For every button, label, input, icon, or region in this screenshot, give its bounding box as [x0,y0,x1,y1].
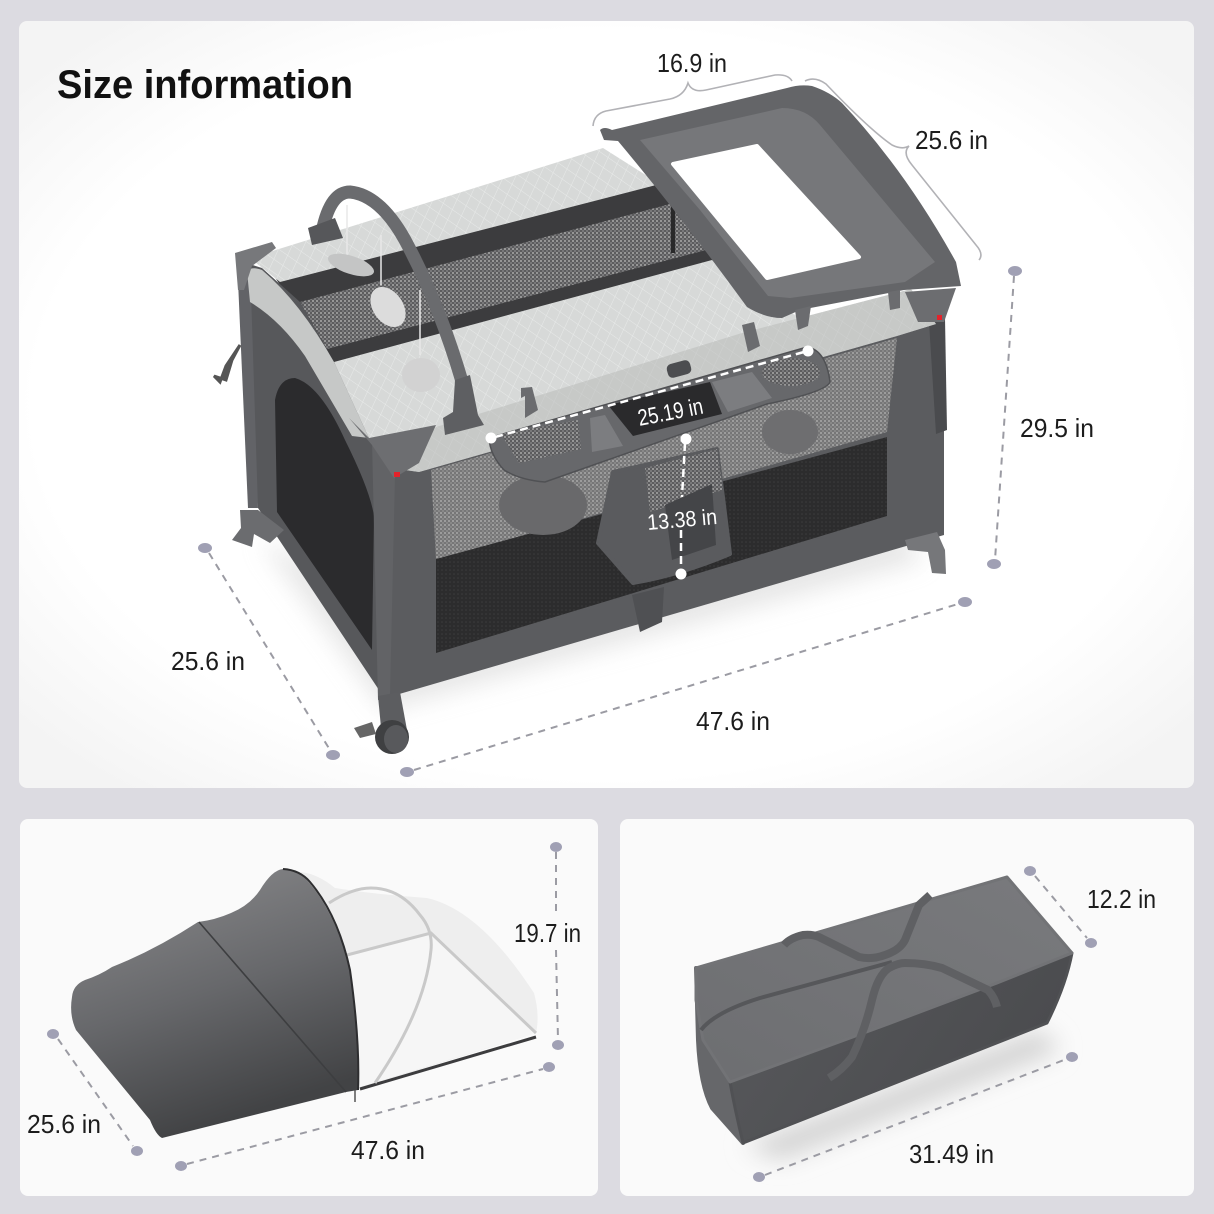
panel: main size information [19,21,1194,788]
label: 16.9 in: 16.9 in [657,48,727,78]
mattress [334,260,800,440]
organiser opening [665,484,716,560]
title: Size information [57,63,353,107]
side latch [214,345,240,382]
label: 25.6 in left: 25.6 in [171,646,245,676]
front upper mesh [431,338,897,560]
toy elephant [402,358,440,392]
handle on rail [666,359,692,379]
hood seam [199,922,346,1092]
right post [929,318,947,434]
zipper [701,962,892,1030]
dimension: width 25.6 in [198,543,340,760]
corner bracket back left [235,242,276,290]
dimension: tray 25.19 in [486,346,814,444]
crib back wall and mesh [270,180,730,365]
rear left foot [232,510,284,547]
label: 12.2 in: 12.2 in [1087,884,1156,914]
center leg [632,587,664,632]
storage organiser [598,449,730,583]
dimension: canopy height [550,842,564,1050]
bracket: 16.9 in [593,75,792,126]
bag shadow [745,1030,1060,1160]
changing pad [673,146,859,278]
panel: canopy [20,819,598,1196]
base edge [360,1037,536,1089]
canopy arcs [329,888,536,1083]
toy fish [325,249,377,281]
organiser mesh [645,449,723,512]
front floor [436,437,887,653]
panel: carry bag [620,819,1194,1196]
label: 19.7 in: 19.7 in [514,918,581,948]
front post [372,440,395,700]
right foot [905,532,946,574]
rail shading [405,289,936,472]
canopy base [347,933,536,1087]
bag left end [696,968,743,1143]
dimension: length 47.6 in [400,597,972,777]
label: 47.6 in: 47.6 in [696,706,770,736]
arched window [275,378,374,650]
mobile arm [308,192,484,435]
mesh bin left [499,475,587,535]
left quilted rail [247,268,369,438]
mesh bin right [762,410,818,454]
mesh canopy [301,872,538,1088]
crib shadow [260,530,925,710]
front panel frame [389,322,944,697]
bracket: 25.6 in top [805,79,981,260]
dimension: bag depth [1024,866,1097,948]
dimension: bag length [753,1052,1078,1182]
label: 31.49 in: 31.49 in [909,1139,994,1169]
bag top [696,877,1072,1082]
label: 25.6 in canopy: 25.6 in [27,1109,101,1139]
left frame post [237,258,258,508]
straps on rail [521,290,900,418]
canopy illustration [71,869,538,1138]
label: 47.6 in canopy: 47.6 in [351,1135,425,1165]
changing table [600,85,961,318]
back quilted rail [250,148,660,282]
label: 29.5 in: 29.5 in [1020,413,1094,443]
front quilted rail [405,289,936,472]
dimension: canopy width [47,1029,143,1156]
label: 13.38 in: 13.38 in [646,504,718,535]
accessory tray [489,347,830,482]
label: 25.19 in: 25.19 in [635,393,705,431]
crib illustration [214,85,961,754]
label: 25.6 in top: 25.6 in [915,125,988,155]
bag straps [784,895,997,1078]
hood rim [283,869,358,1090]
corner bracket front [349,418,436,478]
corner bracket right [905,288,956,322]
dimension: height 29.5 in [987,266,1022,569]
dimension: tray height 13.38 in [676,434,692,580]
toy bear [363,280,413,334]
red markers [394,315,942,477]
mesh lightening [431,338,897,560]
bag front and end [730,953,1072,1143]
grey hood [71,869,358,1138]
front left wheel [354,692,409,754]
left end panel [237,260,389,690]
dimension: canopy length [175,1062,555,1171]
carry bag illustration [696,877,1072,1160]
